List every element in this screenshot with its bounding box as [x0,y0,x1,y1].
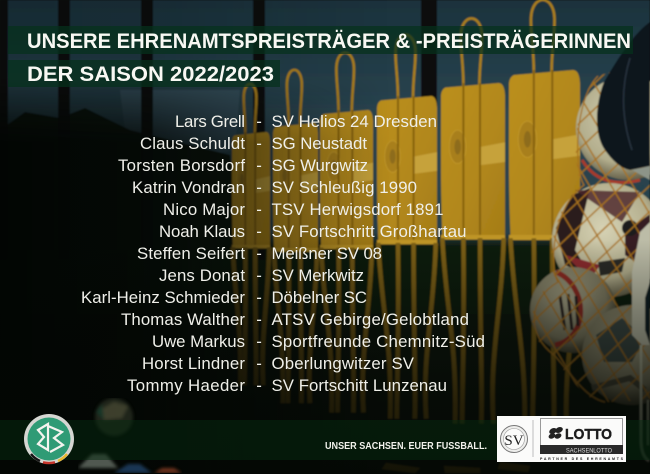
title bar: line 1 [8,26,633,54]
list: separators: - [256,266,262,285]
goal posts [0,0,437,260]
top ball [576,76,650,180]
light sky streak [120,90,240,165]
lotto logo frame: SACHSENLOTTO [566,447,612,454]
list: award winner names: Uwe Markus [152,332,245,351]
list: separators: - [256,112,262,131]
list: separators: - [256,222,262,241]
list: award winner names [81,112,245,395]
list: separators: - [256,244,262,263]
list: separators: - [256,310,262,329]
training mannequins [232,0,580,440]
footer band [0,420,650,460]
list: clubs: Sportfreunde Chemnitz-Süd [272,332,485,351]
icon: SFV seal: SV [504,433,524,449]
blue cone [114,464,152,473]
list: clubs: ATSV Gebirge/Gelobtland [272,310,469,329]
title bar: line 2 [8,60,280,87]
list: award winner names: Lars Grell [175,112,245,131]
mannequin feet [382,462,530,473]
red ball [530,267,616,353]
list: clubs: SV Schleußig 1990 [272,178,417,197]
tree line [0,108,240,250]
list: clubs: Oberlungwitzer SV [272,354,415,373]
title [27,29,631,86]
slogan: UNSER SACHSEN. EUER FUSSBALL. [325,441,487,452]
lotto wordmark: LOTTO [565,427,612,443]
list: award winner names: Karl-Heinz Schmieder [81,288,245,307]
list: separators: - [256,354,262,373]
divider [532,420,534,457]
list: separators: - [256,332,262,351]
list: separators: - [256,178,262,197]
list: clubs: SV Helios 24 Dresden [272,112,437,131]
darkening overlays [0,0,373,404]
list: clubs: TSV Herwigsdorf 1891 [272,200,444,219]
rope [641,345,649,461]
list: separators: - [256,288,262,307]
list: award winner names: Noah Klaus [159,222,245,241]
list: award winner names: Katrin Vondran [132,178,245,197]
list: clubs: SG Wurgwitz [272,156,368,175]
list: award winner names: Jens Donat [159,266,245,285]
list: separators: - [256,134,262,153]
list: clubs: SV Merkwitz [272,266,364,285]
list: separators: - [256,376,262,395]
partner text: PARTNER DES EHRENAMTS [540,457,624,461]
list: separators: - [256,156,262,175]
list: clubs: SG Neustadt [272,134,367,153]
sponsor panel [497,416,626,462]
ball bag [530,22,650,461]
lotto logo frame [540,418,624,461]
list: award winner names: Nico Major [163,200,245,219]
list: award winner names: Claus Schuldt [140,134,245,153]
blurred ball [95,398,133,436]
list: clubs: Döbelner SC [272,288,367,307]
list: separators [256,112,262,395]
list: separators: - [256,200,262,219]
coach trousers [632,222,650,345]
icon: DFB logo [24,414,74,464]
list: clubs: SV Fortschritt Großhartau [272,222,466,241]
white cone [78,454,118,468]
coach jacket [597,22,650,170]
net [532,60,650,402]
red cone [154,468,182,473]
sachsenlotto bar [540,445,623,454]
title: DER SAISON 2022/2023 [27,62,274,86]
list: award winner names: Horst Lindner [142,354,245,373]
list: clubs: SV Fortschitt Lunzenau [272,376,447,395]
list: award winner names: Tommy Haeder [127,376,245,395]
list: award winner names: Torsten Borsdorf [118,156,245,175]
lower ball [582,305,650,405]
icon: clover [548,426,564,440]
list: clubs [272,112,485,395]
list: award winner names: Steffen Seifert [137,244,245,263]
list: clubs: Meißner SV 08 [272,244,382,263]
list: award winner names: Thomas Walther [121,310,245,329]
ground objects [78,398,182,473]
champions league ball [552,183,650,297]
